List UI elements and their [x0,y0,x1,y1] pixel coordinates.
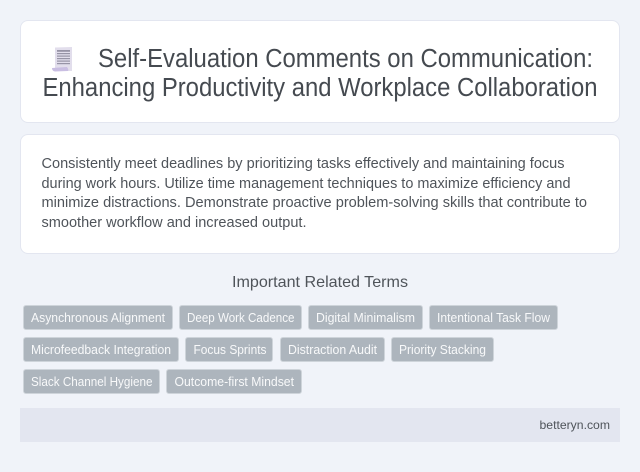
footer site name: betteryn.com [540,418,610,432]
footer bar [20,408,620,442]
description text: during work hours. Utilize time management techniques to maximize efficiency and [42,176,570,192]
term labels: Outcome-first Mindset [174,375,294,389]
icon: document scroll [52,47,72,72]
term labels [31,311,551,389]
term labels: Priority Stacking [399,343,486,357]
term labels: Microfeedback Integration [31,343,171,357]
panel: description card [20,134,620,254]
title: Enhancing Productivity and Workplace Collaboration [42,74,598,102]
title [42,45,598,102]
heading: important related terms: Important Related Terms [232,274,408,291]
term labels: Distraction Audit [288,343,377,357]
term labels: Digital Minimalism [316,311,415,325]
panel: title card [20,20,620,123]
description text: minimize distractions. Demonstrate proactive problem-solving skills that contribute to [42,195,587,211]
term labels: Slack Channel Hygiene [31,375,152,389]
description text [42,156,587,231]
title: Self-Evaluation Comments on Communication: [98,45,593,73]
description text: Consistently meet deadlines by prioritizing tasks effectively and maintaining focus [42,156,564,172]
term labels: Focus Sprints [194,343,266,357]
term labels: Intentional Task Flow [437,311,551,325]
term labels: Deep Work Cadence [187,311,294,325]
term labels: Asynchronous Alignment [31,311,165,325]
description text: smoother workflow and increased output. [42,215,306,231]
